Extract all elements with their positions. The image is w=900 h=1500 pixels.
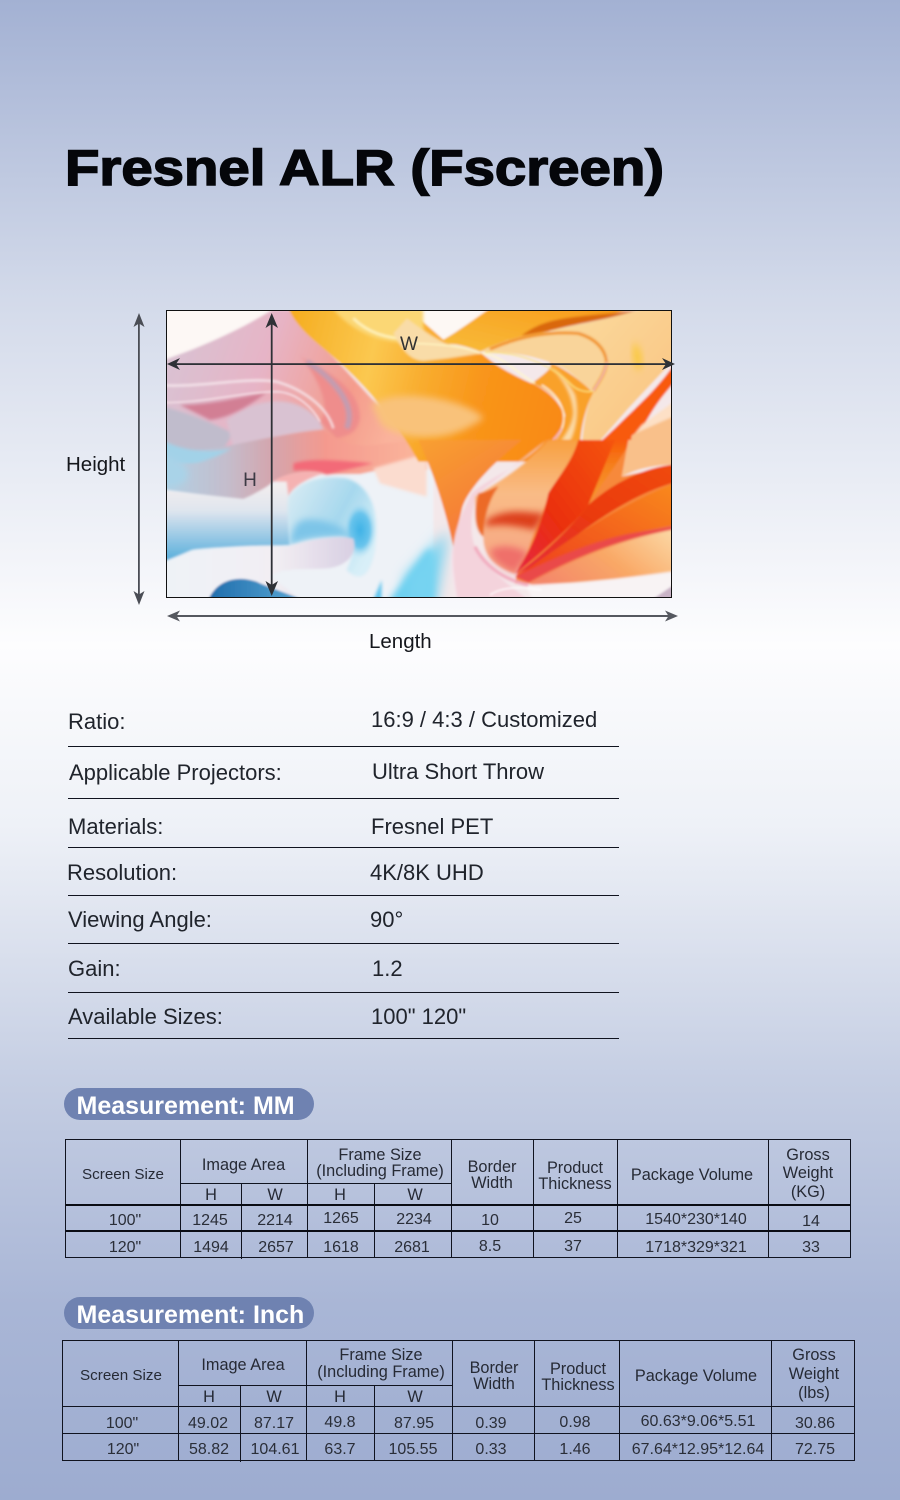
row: 100 inch: 60.63*9.06*5.51: [641, 1413, 755, 1430]
table header: Image Area: [202, 1156, 286, 1174]
spec: gain: [68, 956, 403, 981]
spec: gain: Gain:: [68, 956, 121, 981]
row: 120 inch: 104.61: [251, 1441, 300, 1458]
spec: ratio: 16:9 / 4:3 / Customized: [371, 707, 597, 732]
row: 100 inch: [106, 1413, 835, 1432]
table header: (Including Frame): [316, 1162, 444, 1180]
spec: applicable projectors: [69, 759, 544, 785]
row: 100 inch: 49.8: [324, 1414, 356, 1431]
spec: applicable projectors: Applicable Projectors:: [69, 760, 282, 785]
table header: Width: [473, 1375, 515, 1393]
row: 100 inch: 14: [802, 1213, 820, 1230]
table header: W: [407, 1388, 423, 1406]
screen diagram: [66, 302, 682, 653]
table header: Weight: [789, 1365, 840, 1383]
table header: (KG): [791, 1183, 825, 1201]
table header: Border: [470, 1359, 519, 1377]
row: 120 inch: 58.82: [189, 1441, 229, 1458]
row: 100 inch: 87.95: [394, 1415, 434, 1432]
table header: [80, 1346, 840, 1406]
row: 100 inch: 100": [106, 1415, 138, 1432]
row: 120 inch: 8.5: [479, 1238, 501, 1255]
spec: gain: 1.2: [372, 956, 403, 981]
arrow: H: [266, 313, 278, 596]
spec: materials: Materials:: [68, 814, 163, 839]
spec: resolution: [67, 860, 484, 885]
row: 120 inch: 67.64*12.95*12.64: [632, 1441, 764, 1458]
row: 100 inch: 100": [109, 1212, 141, 1229]
spec: available sizes: [68, 1004, 466, 1029]
table header: Gross: [792, 1346, 836, 1364]
row: 100 inch: 49.02: [188, 1415, 228, 1432]
table header: Image Area: [201, 1356, 286, 1374]
arrow: Length: [167, 610, 678, 622]
row: 120 inch: 120": [107, 1441, 139, 1458]
row: 100 inch: 30.86: [795, 1415, 835, 1432]
row: 120 inch: 105.55: [389, 1441, 438, 1458]
table header: W: [407, 1186, 423, 1204]
row: 120 inch: 2657: [258, 1239, 294, 1256]
row: 100 inch: 1540*230*140: [645, 1211, 747, 1228]
table header: Width: [471, 1174, 513, 1192]
table header: Package Volume: [631, 1166, 753, 1184]
spec: ratio: [68, 707, 597, 734]
table header: W: [267, 1186, 283, 1204]
row: 120 inch: 1.46: [559, 1441, 591, 1458]
row: 120 inch: 2681: [394, 1239, 430, 1256]
row: 120 inch: 0.33: [475, 1441, 507, 1458]
spec: available sizes: Available Sizes:: [68, 1004, 223, 1029]
table header: W: [266, 1388, 282, 1406]
table header: (lbs): [798, 1384, 830, 1402]
row: 120 inch: 72.75: [795, 1441, 835, 1458]
table: measurement in mm: [66, 1140, 850, 1259]
spec: resolution: 4K/8K UHD: [370, 860, 484, 885]
label: Height: Height: [66, 453, 126, 476]
row: 120 inch: 1618: [323, 1239, 359, 1256]
row: 100 inch: [109, 1210, 820, 1230]
table header: Product: [547, 1159, 604, 1177]
row: 120 inch: 37: [564, 1238, 582, 1255]
row: 120 inch: 1494: [193, 1239, 229, 1256]
label: Length: Length: [369, 630, 432, 653]
table header: Thickness: [541, 1376, 615, 1394]
row: 120 inch: 1718*329*321: [645, 1239, 747, 1256]
spec: available sizes: 100" 120": [371, 1004, 466, 1029]
table header: Frame Size: [338, 1146, 422, 1164]
spec: materials: [68, 814, 493, 839]
row: 120 inch: 120": [109, 1239, 141, 1256]
spec: resolution: Resolution:: [67, 860, 177, 885]
spec: viewing angle: 90°: [370, 907, 403, 932]
spec: materials: Fresnel PET: [371, 814, 493, 839]
table header: Screen Size: [82, 1166, 164, 1183]
table header: Border: [468, 1158, 517, 1176]
row: 100 inch: 0.98: [559, 1414, 591, 1431]
row: 100 inch: 1245: [192, 1212, 228, 1229]
spec: applicable projectors: Ultra Short Throw: [372, 759, 544, 784]
table header: Thickness: [538, 1175, 612, 1193]
table header: H: [334, 1186, 346, 1204]
row: 100 inch: 25: [564, 1210, 582, 1227]
row: 120 inch: 63.7: [324, 1441, 356, 1458]
table: measurement in inches: [62, 1340, 854, 1462]
table header: (Including Frame): [317, 1363, 445, 1381]
row: 120 inch: [109, 1238, 820, 1256]
arrow: W: [167, 358, 675, 370]
row: 100 inch: 10: [481, 1212, 499, 1229]
image border: [166, 310, 672, 598]
row: 100 inch: 2234: [396, 1211, 432, 1228]
table header: H: [203, 1388, 215, 1406]
title: Fresnel ALR (Fscreen): [65, 140, 664, 196]
arrow: Height: [134, 313, 144, 605]
spec: ratio: Ratio:: [68, 709, 125, 734]
row: 100 inch: 87.17: [254, 1415, 294, 1432]
heading: Measurement Inch: Measurement: Inch: [76, 1301, 304, 1329]
spec: viewing angle: [68, 907, 403, 932]
table header: Gross: [786, 1146, 830, 1164]
label: H: H: [243, 470, 257, 491]
projected fabric image: [157, 302, 682, 607]
row: 120 inch: [107, 1441, 835, 1458]
table header: Weight: [783, 1164, 834, 1182]
row: 100 inch: 0.39: [475, 1415, 507, 1432]
label: W: W: [400, 334, 418, 355]
table header: Product: [550, 1360, 607, 1378]
table header: Screen Size: [80, 1367, 162, 1384]
table header: H: [205, 1186, 217, 1204]
specification list: [67, 707, 619, 1038]
row: 100 inch: 2214: [257, 1212, 293, 1229]
table header: Frame Size: [339, 1346, 423, 1364]
table header: H: [334, 1388, 346, 1406]
table header: Package Volume: [635, 1367, 757, 1385]
row: 100 inch: 1265: [323, 1210, 359, 1227]
heading: Measurement MM: Measurement: MM: [76, 1092, 295, 1120]
spec: viewing angle: Viewing Angle:: [68, 907, 212, 932]
table header: [82, 1146, 834, 1204]
row: 120 inch: 33: [802, 1239, 820, 1256]
